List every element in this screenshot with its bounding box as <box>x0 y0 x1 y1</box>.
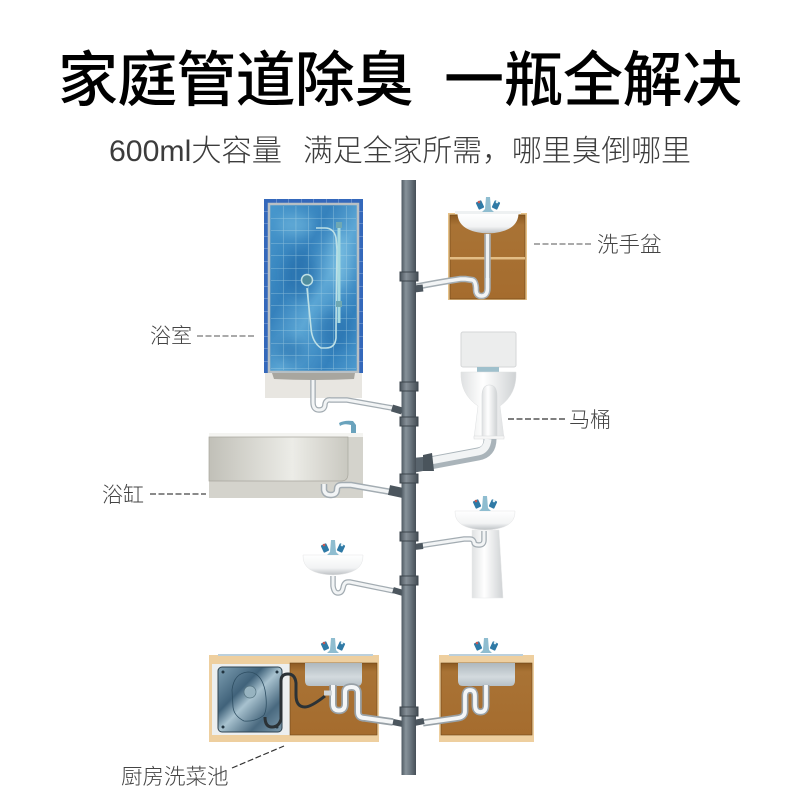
toilet <box>461 332 516 439</box>
label: 马桶 <box>508 409 611 432</box>
label: 浴室 <box>150 325 254 348</box>
bathtub drain pipe <box>324 484 403 495</box>
pedestal sink <box>455 496 515 598</box>
kitchen cabinet right <box>414 638 534 742</box>
label: 马桶: 马桶 <box>569 409 611 432</box>
subtitle: 600ml大容量 <box>109 135 282 168</box>
label: 洗手盆: 洗手盆 <box>597 233 662 257</box>
title <box>58 47 742 114</box>
washing machine <box>218 667 282 732</box>
right kitchen trap pipe <box>414 685 486 723</box>
hose <box>265 674 325 727</box>
label: 厨房洗菜池: 厨房洗菜池 <box>121 765 229 789</box>
main vertical drain pipe <box>400 180 418 775</box>
shower drain pipe <box>313 380 402 411</box>
wall sink <box>303 540 363 575</box>
wash basin drain pipe <box>414 278 488 296</box>
subtitle <box>109 135 691 168</box>
title: 家庭管道除臭 <box>58 47 414 114</box>
title: 一瓶全解决 <box>444 47 742 114</box>
kitchen cabinet left <box>209 638 403 742</box>
label: 浴室: 浴室 <box>150 325 192 348</box>
wash basin cabinet <box>448 197 527 300</box>
kitchen trap pipe <box>324 685 403 724</box>
kitchen sink basin <box>305 663 362 686</box>
toilet drain pipe <box>412 439 490 473</box>
shower room <box>264 199 363 398</box>
subtitle: 满足全家所需，哪里臭倒哪里 <box>303 135 691 168</box>
label: 厨房洗菜池 <box>121 746 284 789</box>
label: 浴缸 <box>102 484 206 507</box>
label: 洗手盆 <box>534 233 662 257</box>
bathtub <box>209 421 363 498</box>
label: 浴缸: 浴缸 <box>102 484 144 507</box>
pedestal sink drain pipe <box>414 531 484 547</box>
wall sink drain pipe <box>333 576 403 593</box>
